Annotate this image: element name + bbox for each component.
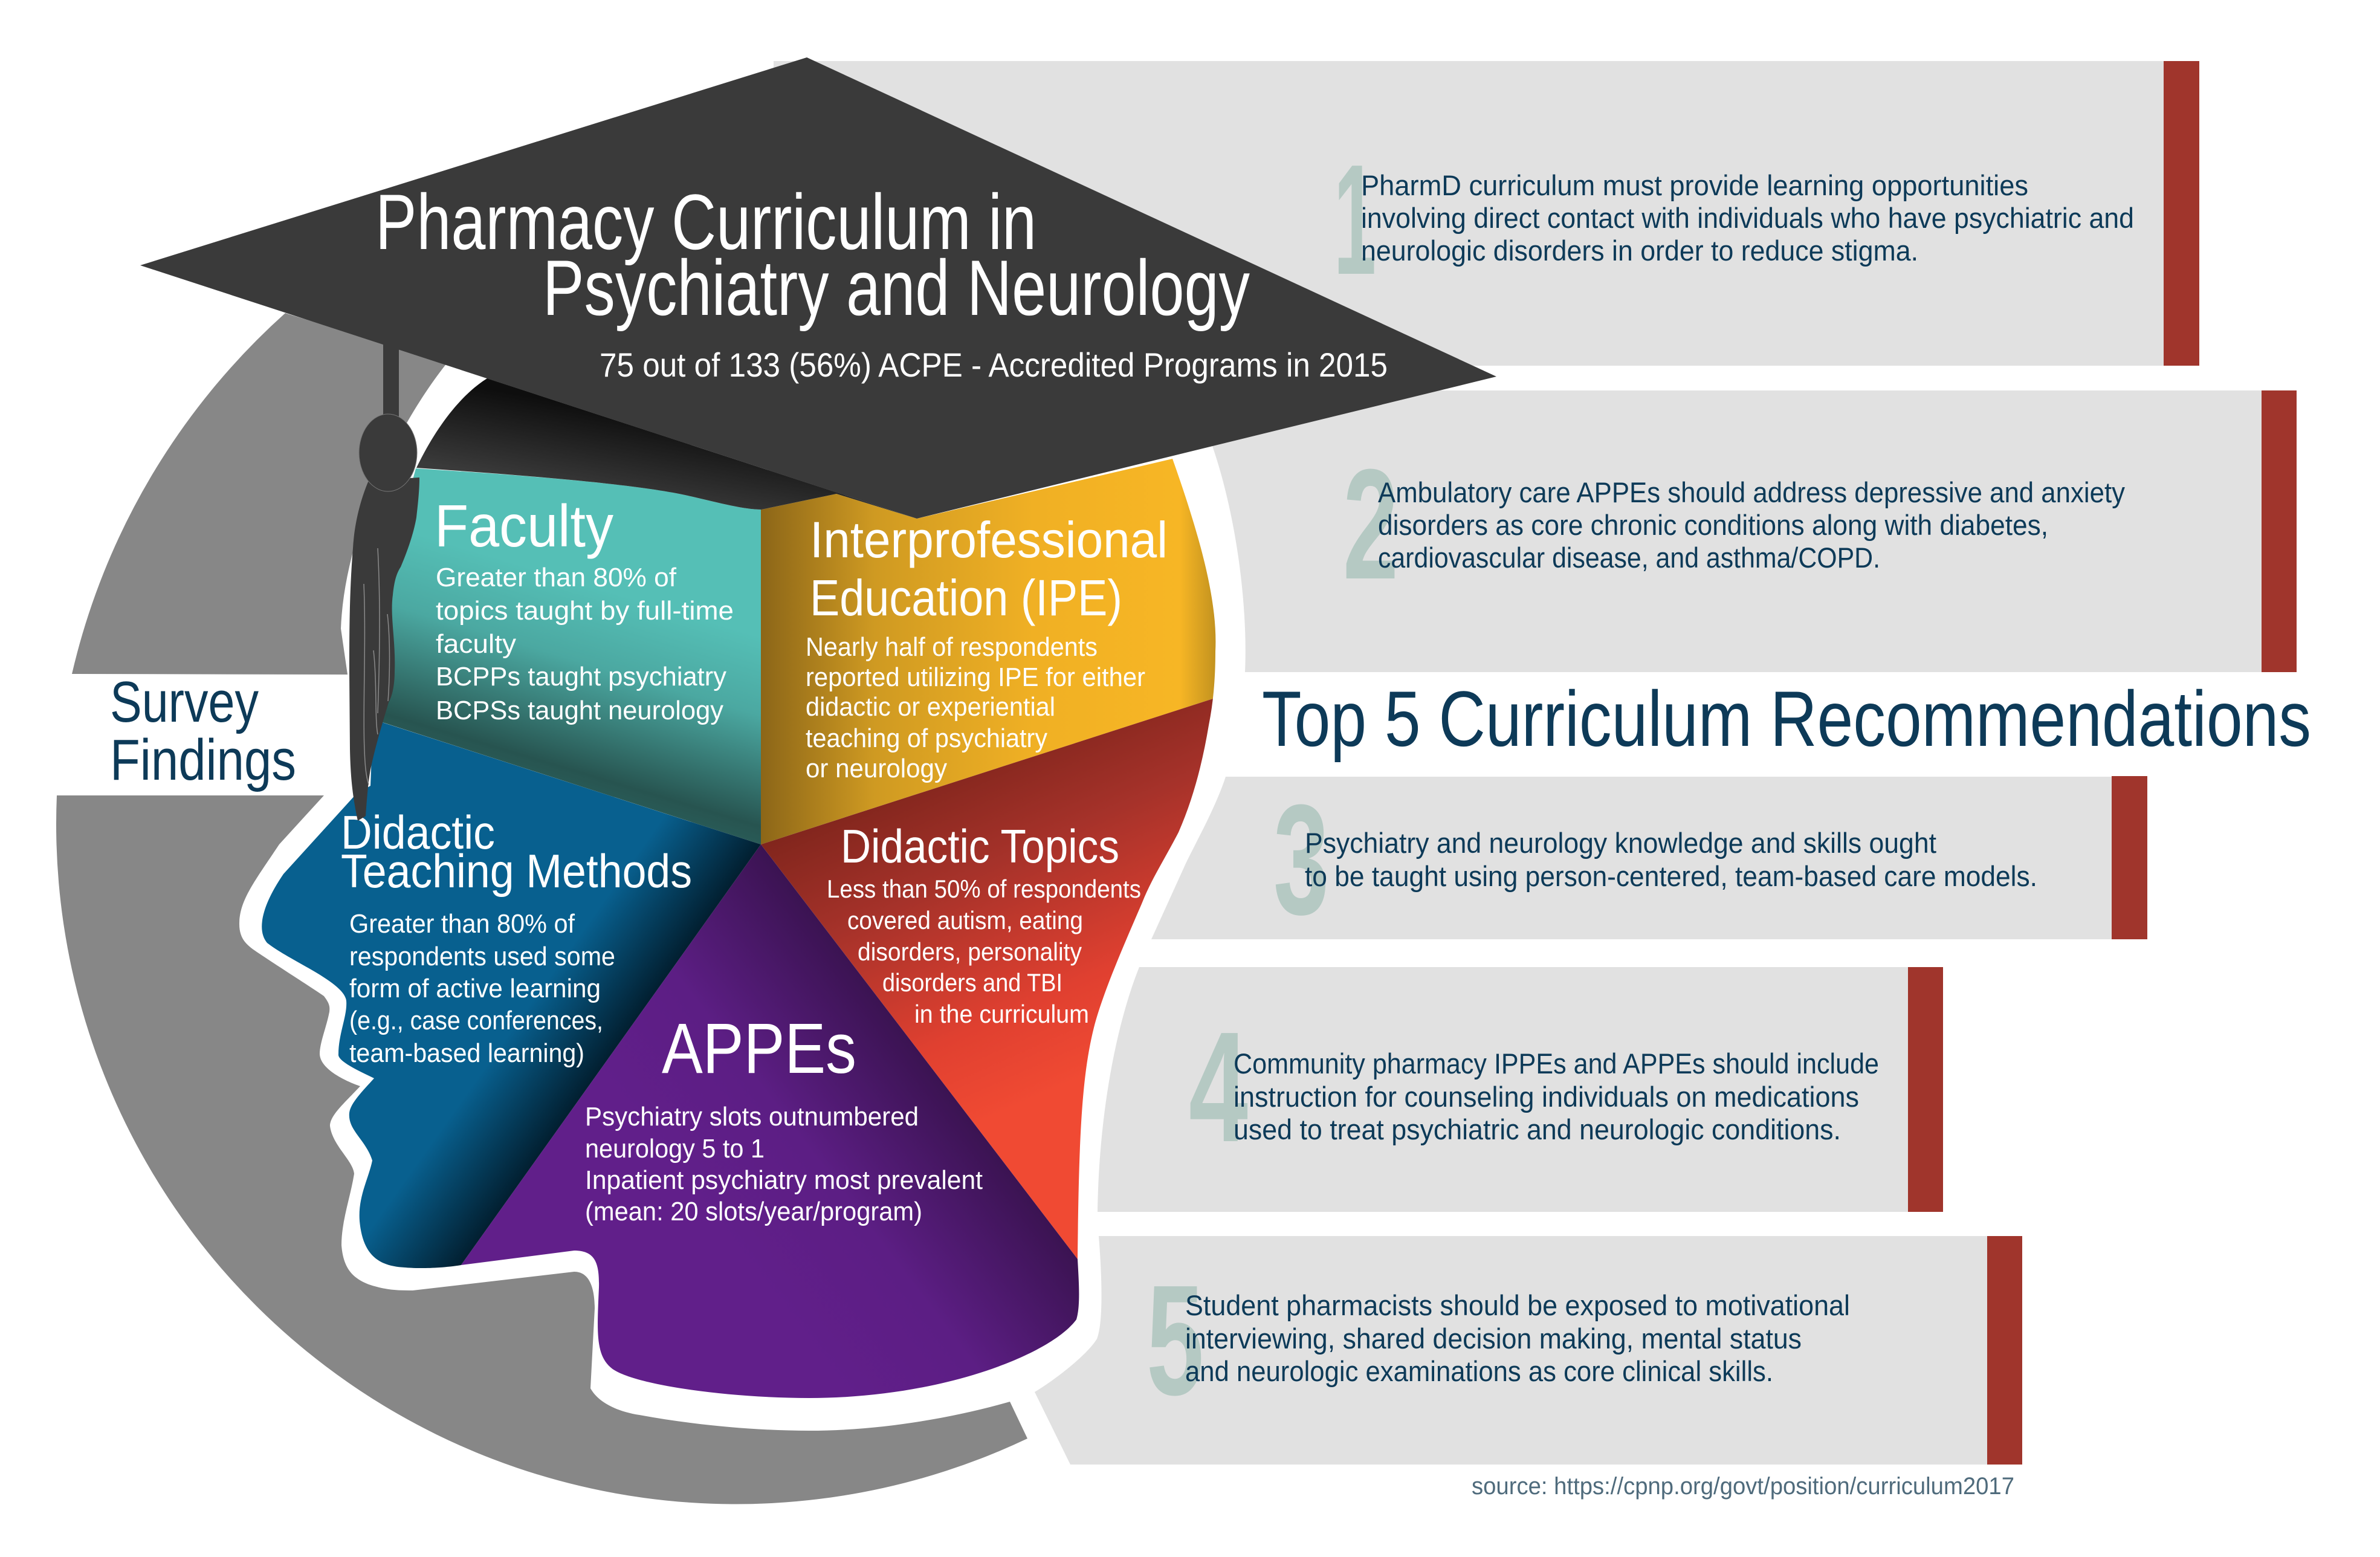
number 3: 3	[1273, 772, 1329, 948]
grey ring: lower arc	[56, 795, 1027, 1504]
text: recommendation 3: Psychiatry and neurology knowledge and skills ought	[1305, 827, 1936, 859]
graduation cap	[140, 57, 1496, 821]
panel: faculty	[435, 493, 734, 725]
panel: didactic teaching methods: form of active learning	[349, 974, 601, 1003]
panel: didactic teaching methods: respondents used some	[349, 942, 615, 971]
panel: interprofessional education: Interprofessional	[810, 511, 1168, 568]
panel: faculty: topics taught by full-time	[436, 596, 734, 626]
title: Psychiatry and Neurology	[543, 244, 1250, 332]
text: recommendation 2: Ambulatory care APPEs should address depressive and anxiety	[1378, 476, 2125, 508]
panel: faculty: Faculty	[435, 493, 613, 559]
text: recommendation 4	[1234, 1047, 1879, 1145]
panel: APPEs: Inpatient psychiatry most prevalent	[585, 1165, 983, 1195]
heading: survey findings: Survey	[110, 670, 259, 734]
text: recommendation 1: PharmD curriculum must provide learning opportunities	[1361, 169, 2028, 201]
panel: didactic topics: disorders, personality	[858, 937, 1082, 966]
text: recommendation 5: and neurologic examinations as core clinical skills.	[1185, 1355, 1773, 1387]
panel: didactic teaching methods: Didactic	[341, 806, 495, 859]
title: Pharmacy Curriculum in	[375, 178, 1036, 266]
tassel	[349, 338, 419, 821]
number 5: 5	[1146, 1253, 1204, 1428]
text: recommendation 4: Community pharmacy IPPEs and APPEs should include	[1234, 1047, 1879, 1080]
panel: didactic topics: covered autism, eating	[847, 906, 1083, 934]
text: recommendation 5	[1185, 1289, 1850, 1387]
text: recommendation 3	[1305, 827, 2037, 892]
panel: interprofessional education: Education (IPE)	[810, 569, 1122, 626]
recommendation panel 4	[1098, 967, 1943, 1212]
panel: didactic teaching methods: Teaching Methods	[341, 844, 692, 898]
panel: faculty: BCPPs taught psychiatry	[436, 662, 726, 691]
text: recommendation 5: Student pharmacists should be exposed to motivational	[1185, 1289, 1850, 1321]
number 2: 2	[1343, 437, 1399, 612]
panel: didactic teaching methods: team-based learning)	[349, 1038, 584, 1068]
panel: faculty: faculty	[436, 629, 516, 659]
panel: didactic topics: in the curriculum	[914, 1000, 1089, 1028]
panel: APPEs: Psychiatry slots outnumbered	[585, 1102, 919, 1131]
panel: interprofessional education: teaching of psychiatry	[806, 723, 1047, 753]
panel: didactic teaching methods: Greater than 80% of	[349, 909, 575, 939]
wedge backgrounds	[262, 459, 1216, 1398]
text: recommendation 1: neurologic disorders in order to reduce stigma.	[1361, 235, 1918, 267]
panel: interprofessional education	[806, 511, 1168, 783]
panel: didactic topics: Less than 50% of respondents	[827, 875, 1141, 903]
recommendation panel 1: 1	[1334, 132, 1376, 308]
title	[375, 178, 1388, 384]
text: recommendation 2: cardiovascular disease, and asthma/COPD.	[1378, 542, 1880, 574]
source note: source: https://cpnp.org/govt/position/curriculum2017	[1472, 1473, 2014, 1500]
recommendation panel 3	[1151, 772, 2147, 948]
text: recommendation 3: to be taught using person-centered, team-based care models.	[1305, 860, 2037, 892]
text: recommendation 4: instruction for counseling individuals on medications	[1234, 1081, 1859, 1113]
panel: faculty: BCPSs taught neurology	[436, 696, 723, 725]
panel: APPEs	[585, 1009, 983, 1226]
subtitle: 75 out of 133 (56%) ACPE - Accredited Programs in 2015	[600, 346, 1388, 384]
recommendation panel 5	[1035, 1236, 2022, 1465]
panel: interprofessional education: didactic or experiential	[806, 692, 1055, 722]
panel: APPEs: (mean: 20 slots/year/program)	[585, 1197, 922, 1226]
panel: interprofessional education: reported utilizing IPE for either	[806, 662, 1145, 692]
heading: survey findings	[110, 670, 296, 792]
text: recommendation 2: disorders as core chronic conditions along with diabetes,	[1378, 509, 2048, 541]
panel: APPEs: APPEs	[662, 1009, 856, 1089]
cap skull	[416, 378, 917, 519]
panel: didactic topics: disorders and TBI	[882, 968, 1062, 997]
panel: didactic topics: Didactic Topics	[841, 820, 1119, 873]
panel: APPEs: neurology 5 to 1	[585, 1134, 765, 1164]
panel: didactic teaching methods: (e.g., case conferences,	[349, 1006, 603, 1035]
mortarboard	[140, 57, 1496, 519]
text: recommendation 1	[1361, 169, 2134, 267]
panel: interprofessional education: or neurology	[806, 754, 947, 783]
text: recommendation 4: used to treat psychiatric and neurologic conditions.	[1234, 1113, 1841, 1145]
recommendation panel 2	[1148, 390, 2297, 672]
panel: didactic teaching methods	[341, 806, 692, 1068]
text: recommendation 2	[1378, 476, 2125, 574]
panel: didactic topics	[827, 820, 1141, 1028]
panel: faculty: Greater than 80% of	[436, 563, 677, 592]
text: recommendation 5: interviewing, shared decision making, mental status	[1185, 1322, 1802, 1355]
grey ring: upper arc	[72, 313, 447, 675]
panel: interprofessional education: Nearly half of respondents	[806, 632, 1098, 662]
head with survey wedges	[262, 459, 1216, 1398]
recommendation panel 1	[774, 61, 2199, 366]
number 4: 4	[1189, 1000, 1249, 1175]
heading: survey findings: Findings	[110, 728, 296, 792]
text: recommendation 1: involving direct contact with individuals who have psychiatric and	[1361, 202, 2134, 234]
